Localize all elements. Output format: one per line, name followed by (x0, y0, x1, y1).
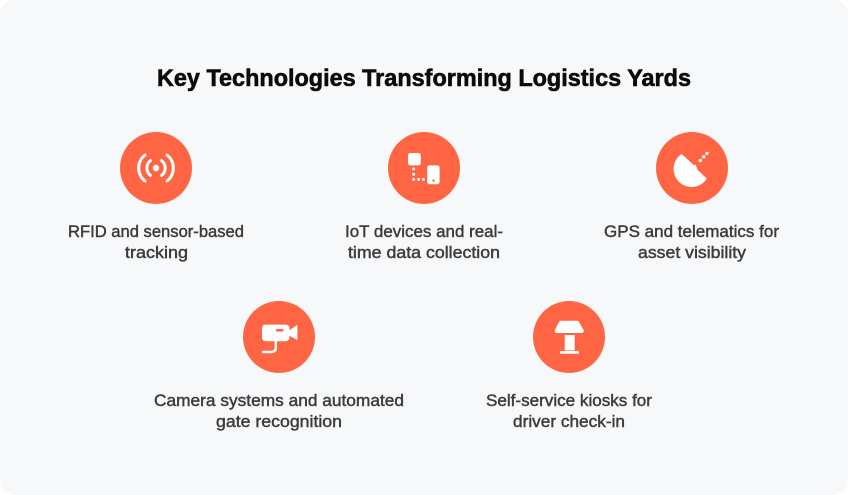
icon: camera (243, 301, 315, 373)
label (68, 223, 244, 262)
label: driver check-in (513, 413, 625, 431)
icon: kiosk (533, 301, 605, 373)
label (486, 392, 653, 431)
item: Self-service kiosks for driver check-in (486, 301, 653, 431)
label: RFID and sensor-based (68, 223, 244, 241)
label: gate recognition (216, 413, 342, 431)
label (604, 223, 780, 262)
label: tracking (125, 244, 188, 262)
label (345, 223, 503, 262)
icon: RFID signal (120, 132, 192, 204)
label: Self-service kiosks for (486, 392, 653, 410)
item: GPS and telematics for asset visibility (604, 132, 780, 262)
label: time data collection (348, 244, 500, 262)
item: RFID and sensor-based tracking (68, 132, 244, 262)
label: IoT devices and real- (345, 223, 503, 241)
item: IoT devices and real-time data collection (345, 132, 503, 262)
label: asset visibility (638, 244, 747, 262)
icon: IoT devices (388, 132, 460, 204)
label: GPS and telematics for (604, 223, 780, 241)
label: Camera systems and automated (154, 392, 404, 410)
icon: satellite dish (656, 132, 728, 204)
item: Camera systems and automated gate recognition (154, 301, 404, 431)
label (154, 392, 404, 431)
title: Key Technologies Transforming Logistics Yards (157, 65, 691, 92)
